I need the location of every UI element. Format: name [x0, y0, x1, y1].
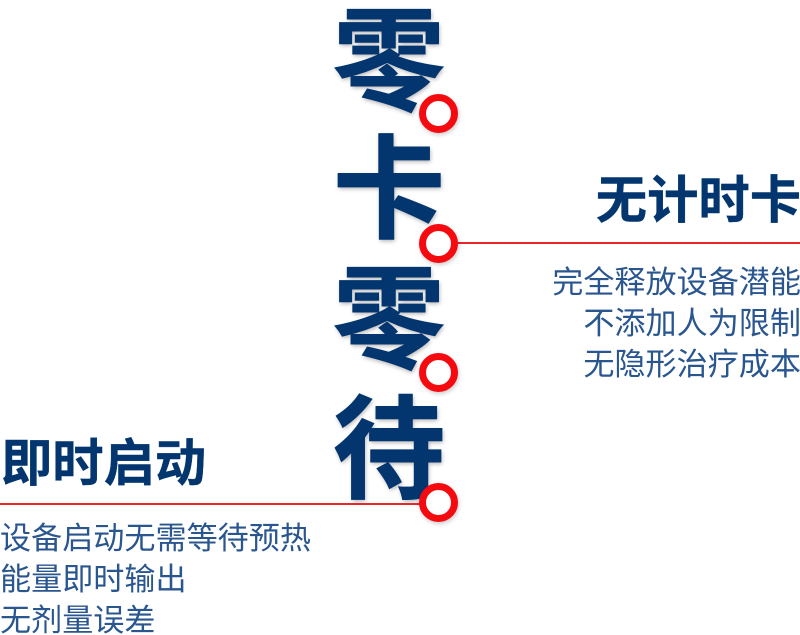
- text block: right: [552, 265, 800, 382]
- connector line: right: [450, 242, 800, 244]
- text block: right: 完全释放设备潜能: [552, 265, 800, 300]
- red ring 2: [419, 224, 458, 263]
- text block: left: 设备启动无需等待预热: [0, 521, 311, 556]
- red ring 1: [419, 94, 458, 133]
- text block: right: 不添加人为限制: [583, 306, 800, 341]
- red ring 3: [419, 353, 458, 392]
- text block: left: 能量即时输出: [0, 562, 187, 597]
- text block: right: 无隐形治疗成本: [583, 347, 800, 382]
- character 卡: 卡: [333, 128, 445, 253]
- red ring 4: [419, 483, 458, 522]
- character 零 second: 零: [333, 258, 445, 383]
- connector line: left: [0, 503, 425, 505]
- heading: 即时启动: 即时启动: [1, 435, 206, 492]
- character 零: 零: [333, 0, 445, 125]
- character 待: 待: [333, 388, 445, 513]
- heading: 无计时卡: 无计时卡: [596, 172, 800, 229]
- vertical title: 零卡零待: [333, 0, 446, 513]
- text block: left: [0, 521, 311, 635]
